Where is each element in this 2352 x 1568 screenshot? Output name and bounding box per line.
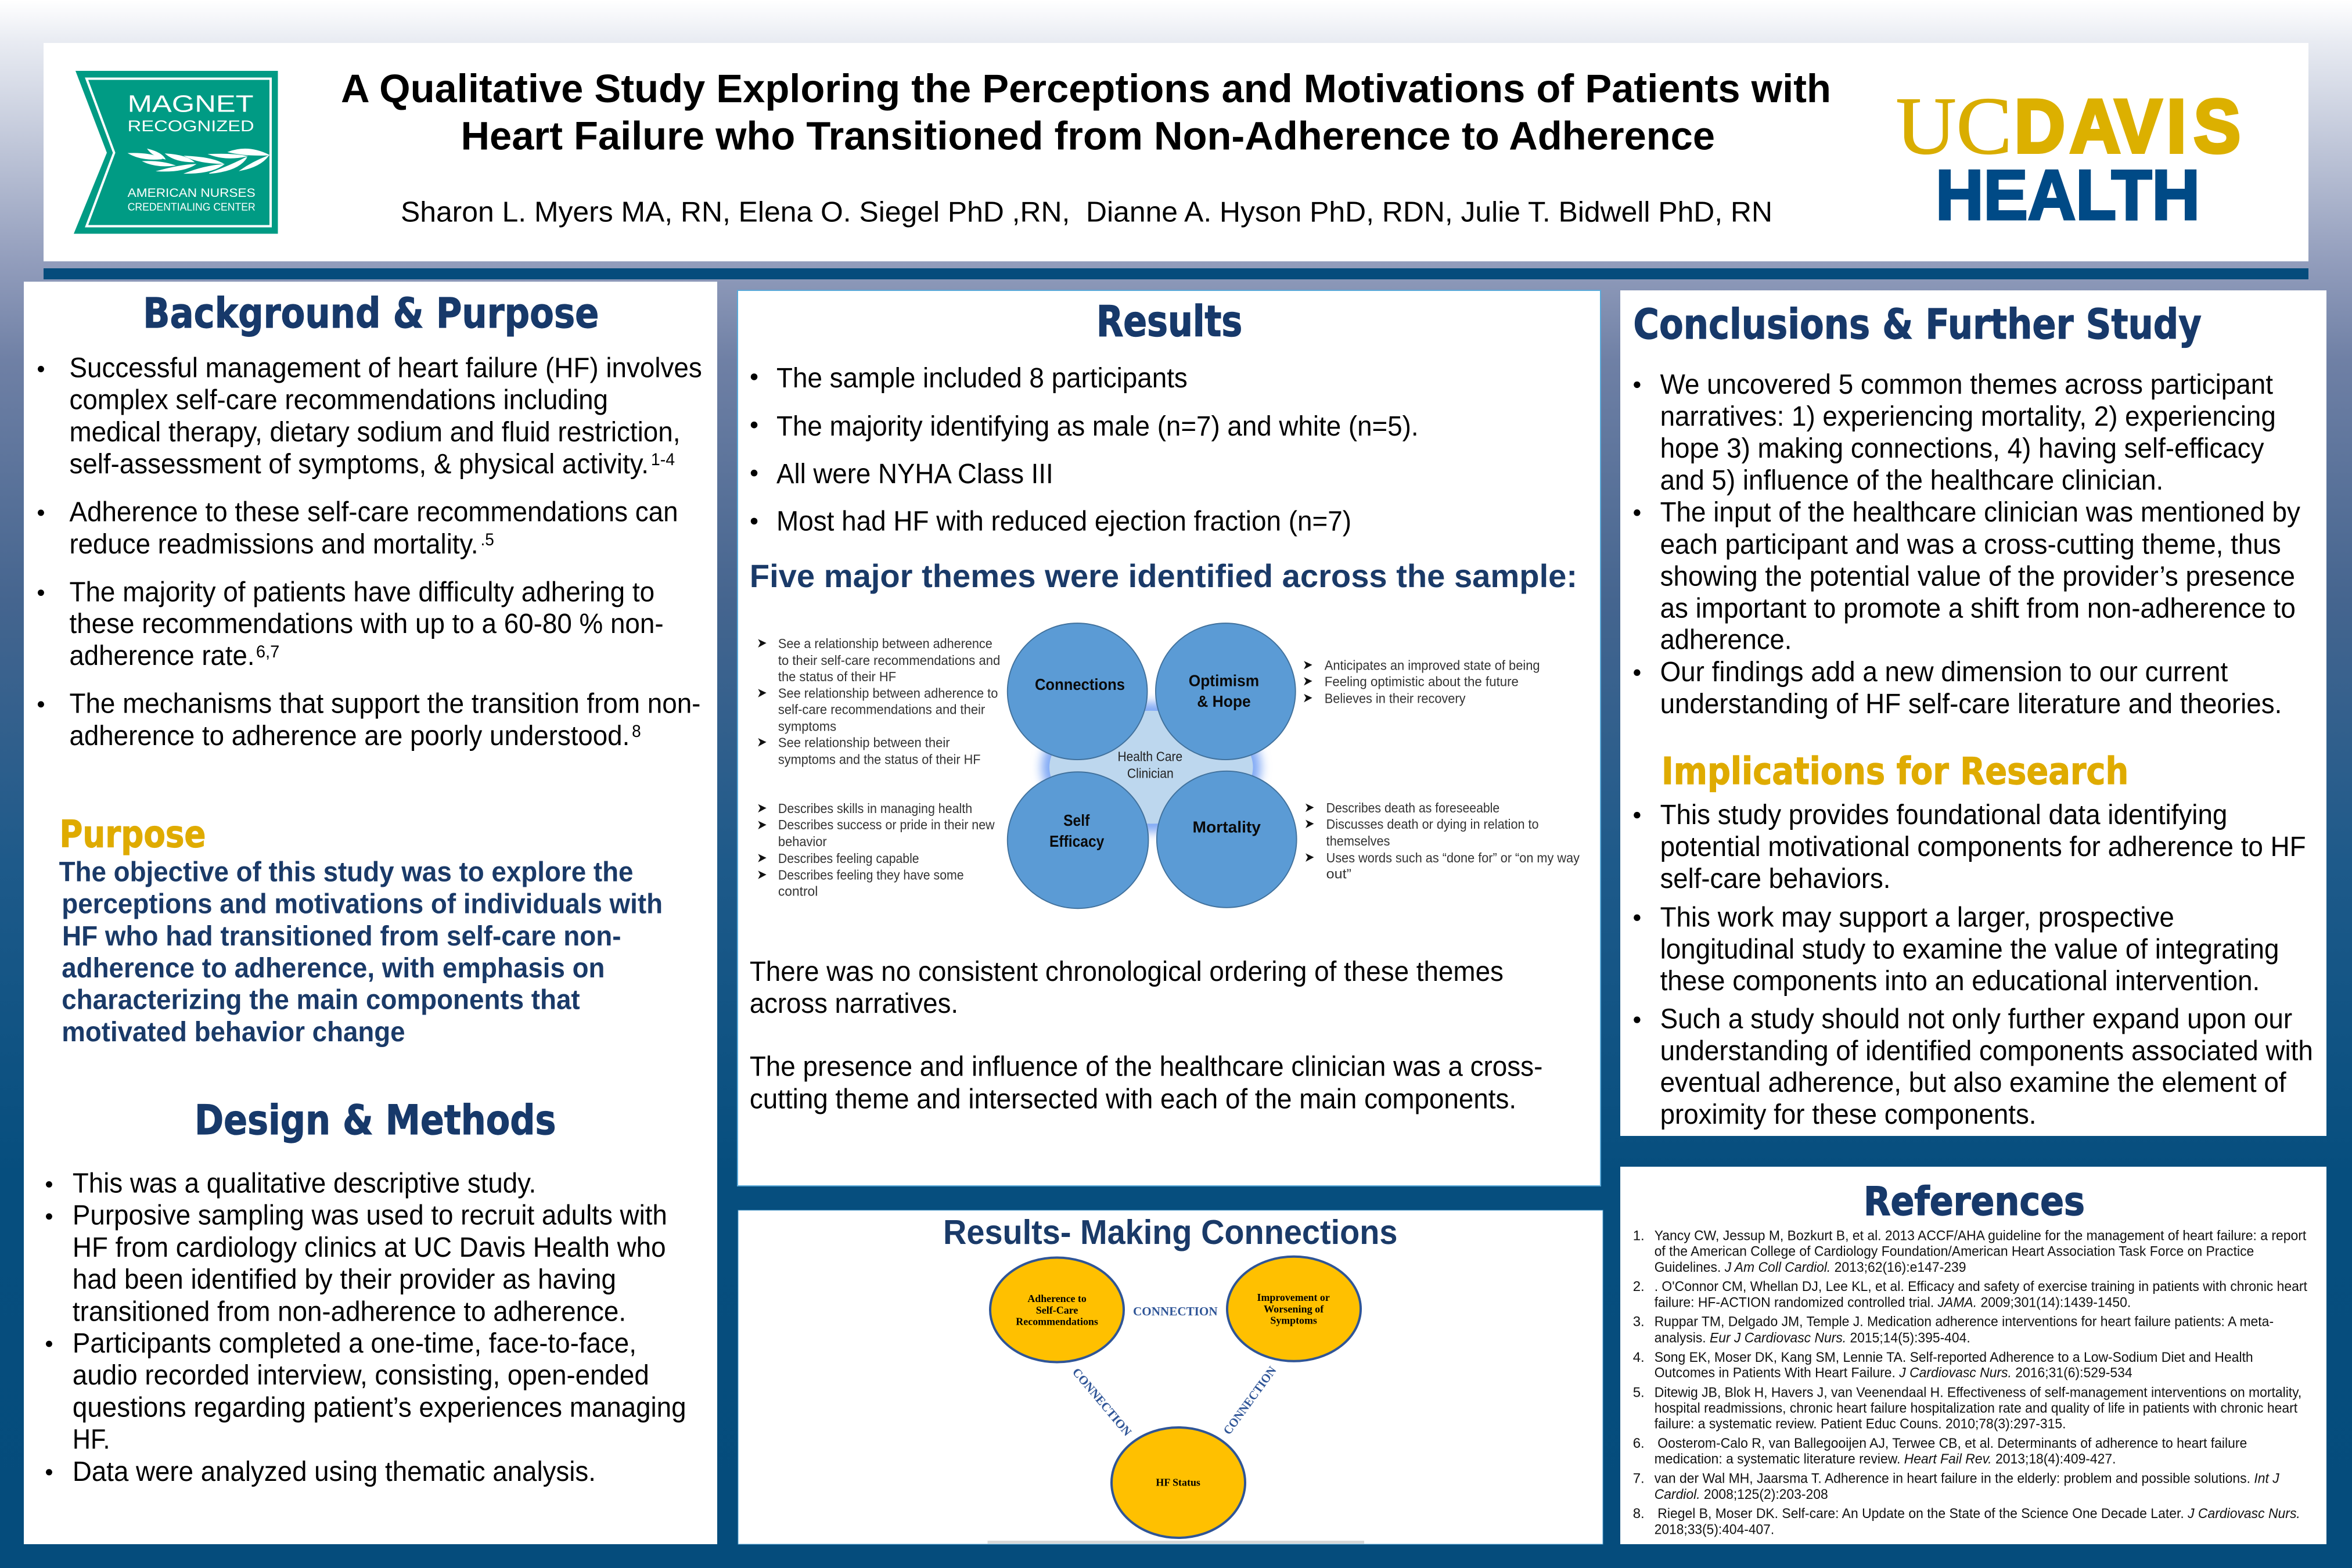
heading: Results: Results xyxy=(1096,297,1242,347)
title xyxy=(341,66,1831,158)
authors: Sharon L. Myers MA, RN, Elena O. Siegel PhD ,RN, Dianne A. Hyson PhD, RDN, Julie T. Bidwell PhD, RN xyxy=(401,197,1772,228)
circle: symptoms: Worsening of xyxy=(1264,1303,1324,1315)
panel: background, purpose, design and methods xyxy=(24,282,717,1544)
purpose statement: perceptions and motivations of individuals with xyxy=(62,889,663,920)
purpose statement: The objective of this study was to explore the xyxy=(59,857,633,887)
logo: Magnet Recognized: CREDENTIALING CENTER xyxy=(128,202,256,213)
logo: UC Davis Health: HEALTH xyxy=(1936,156,2200,235)
heading: Implications for Research: Implications for Research xyxy=(1661,750,2128,793)
purpose statement: characterizing the main components that xyxy=(62,985,580,1016)
circle: self efficacy: Self xyxy=(1063,811,1090,829)
reference list: 2. xyxy=(1633,1279,1645,1294)
bullet: further study xyxy=(1634,1004,2313,1130)
list: self efficacy descriptors: Describes feeling they have some xyxy=(778,868,964,883)
reference list: 1. xyxy=(1633,1228,1645,1243)
bullet: further study: proximity for these components. xyxy=(1660,1099,2037,1130)
list: self efficacy descriptors: Describes feeling capable xyxy=(778,851,919,866)
bullet list: methods: Data were analyzed using thematic analysis. xyxy=(73,1456,596,1487)
reference list: 2018;33(5):404-407. xyxy=(1655,1522,1774,1538)
reference list: Ditewig JB, Blok H, Havers J, van Veenendaal H. Effectiveness of self-management interventions on mortality, xyxy=(1655,1385,2301,1401)
bullet list: conclusions: understanding of HF self-care literature and theories. xyxy=(1660,689,2282,720)
list: self efficacy descriptors: Describes skills in managing health xyxy=(778,801,972,816)
reference list xyxy=(1633,1228,2307,1538)
list: mortality descriptors: Uses words such as “done for” or “on my way xyxy=(1326,850,1580,865)
bullet list: conclusions: showing the potential value of the provider’s presence xyxy=(1660,561,2295,592)
list: connections descriptors: self-care recommendations and their xyxy=(778,702,986,717)
header banner xyxy=(44,43,2308,261)
bullet list: conclusions xyxy=(1634,369,2300,720)
bullet list: background: self-assessment of symptoms, & physical activity. xyxy=(69,449,649,480)
reference list: Yancy CW, Jessup M, Bozkurt B, et al. 2013 ACCF/AHA guideline for the management of heart failure: a report xyxy=(1655,1228,2307,1243)
circle: self efficacy: Efficacy xyxy=(1049,832,1105,850)
bullet list: background: Successful management of heart failure (HF) involves xyxy=(69,353,702,384)
bullet list: background: .5 xyxy=(481,530,494,549)
reference list: failure: HF-ACTION randomized controlled trial. JAMA. 2009;301(14):1439-1450. xyxy=(1655,1295,2131,1311)
circle: self efficacy xyxy=(1008,772,1148,908)
center: health care clinician: Health Care xyxy=(1117,749,1182,764)
circle: adherence xyxy=(990,1258,1124,1362)
diagram: five themes xyxy=(758,623,1580,908)
heading: Design & Methods: Design & Methods xyxy=(195,1096,556,1144)
circle: optimism and hope: & Hope xyxy=(1197,692,1251,710)
reference list: van der Wal MH, Jaarsma T. Adherence in heart failure in the elderly: problem and possible solutions. Int J xyxy=(1655,1470,2280,1487)
bullet list: methods: had been identified by their provider as having xyxy=(73,1264,616,1295)
list: mortality descriptors: themselves xyxy=(1326,833,1390,848)
list: mortality descriptors: out” xyxy=(1326,866,1351,882)
reference list: failure: a systematic review. Patient Educ Couns. 2010;78(3):297-315. xyxy=(1655,1416,2066,1432)
circle: adherence: Self-Care xyxy=(1036,1304,1078,1316)
circle: connections xyxy=(1008,623,1148,760)
bullet list: implications: self-care behaviors. xyxy=(1660,864,1890,894)
heading: Background & Purpose: Background & Purpose xyxy=(143,289,599,337)
bullet list: conclusions: hope 3) making connections, 4) having self-efficacy xyxy=(1660,433,2264,464)
list: optimism descriptors: Feeling optimistic about the future xyxy=(1325,674,1519,689)
bullet list: sample: Most had HF with reduced ejection fraction (n=7) xyxy=(776,506,1351,537)
bullet list: implications: This work may support a larger, prospective xyxy=(1660,902,2174,933)
list: connections descriptors xyxy=(758,636,1000,767)
purpose statement: adherence to adherence, with emphasis on xyxy=(62,953,605,984)
list: optimism descriptors xyxy=(1304,658,1540,706)
bullet list: background: The mechanisms that support the transition from non- xyxy=(69,689,700,720)
bullet list: background: 8 xyxy=(632,722,641,741)
logo: UC Davis Health: UC xyxy=(1896,81,2012,171)
list: connections descriptors: See relationship between adherence to xyxy=(778,686,998,701)
list: connections descriptors: See a relationship between adherence xyxy=(778,636,992,651)
circle: adherence: Adherence to xyxy=(1027,1293,1087,1304)
bullet list: background: The majority of patients have difficulty adhering to xyxy=(69,577,654,607)
bullet list: conclusions: narratives: 1) experiencing mortality, 2) experiencing xyxy=(1660,401,2276,432)
list: connections descriptors: the status of their HF xyxy=(778,669,896,684)
text block: chronological ordering and clinician: cutting theme and intersected with each of the main components. xyxy=(750,1084,1516,1115)
logo: Magnet Recognized: MAGNET xyxy=(128,91,254,117)
reference list: 7. xyxy=(1633,1470,1645,1487)
panel: results xyxy=(738,290,1601,1186)
circle: HF status: HF Status xyxy=(1156,1476,1200,1488)
bullet list: conclusions: The input of the healthcare clinician was mentioned by xyxy=(1660,497,2300,528)
bullet list: conclusions: Our findings add a new dimension to our current xyxy=(1660,657,2228,688)
reference list: 5. xyxy=(1633,1385,1645,1401)
title: Heart Failure who Transitioned from Non-Adherence to Adherence xyxy=(461,113,1715,158)
reference list: 3. xyxy=(1633,1314,1645,1330)
bullet list: methods: HF from cardiology clinics at UC Davis Health who xyxy=(73,1232,666,1263)
bullet: further study: understanding of identified components associated with xyxy=(1660,1036,2313,1067)
circle: adherence: Recommendations xyxy=(1016,1316,1098,1328)
bullet list: conclusions: We uncovered 5 common themes across participant xyxy=(1660,369,2273,400)
list: connections descriptors: See relationship between their xyxy=(778,735,950,750)
diagram: connection triangle xyxy=(990,1257,1361,1538)
bullet list: background: adherence rate. xyxy=(69,641,254,671)
bullet list: implications: This study provides foundational data identifying xyxy=(1660,800,2227,830)
bullet list: methods: questions regarding patient’s experiences managing xyxy=(73,1392,686,1423)
list: connections descriptors: symptoms xyxy=(778,718,836,733)
bullet list: background: adherence to adherence are poorly understood. xyxy=(69,721,630,751)
panel: references xyxy=(1620,1167,2326,1544)
label: connection right: CONNECTION xyxy=(1220,1364,1279,1437)
purpose statement xyxy=(59,857,663,1048)
bullet list: background: reduce readmissions and mortality. xyxy=(69,529,479,560)
list: self efficacy descriptors xyxy=(758,801,995,899)
center: health care clinician: Clinician xyxy=(1127,765,1174,781)
bullet list: background: medical therapy, dietary sodium and fluid restriction, xyxy=(69,417,680,448)
bullet list: methods: This was a qualitative descriptive study. xyxy=(73,1168,536,1199)
reference list: 4. xyxy=(1633,1350,1645,1365)
bullet list: implications: potential motivational components for adherence to HF xyxy=(1660,832,2306,862)
logo: UC Davis Health xyxy=(1896,81,2240,235)
purpose statement: HF who had transitioned from self-care non- xyxy=(62,921,621,952)
list: optimism descriptors: Anticipates an improved state of being xyxy=(1325,658,1540,673)
bullet list: methods: audio recorded interview, consisting, open-ended xyxy=(73,1360,649,1391)
bullet list: background: 1-4 xyxy=(651,450,675,469)
reference list: Cardiol. 2008;125(2):203-208 xyxy=(1655,1487,1828,1502)
bullet: further study: Such a study should not only further expand upon our xyxy=(1660,1004,2292,1035)
text block: chronological ordering and clinician xyxy=(750,956,1542,1115)
bullet list: methods xyxy=(46,1168,686,1487)
bullet list: background: these recommendations with up to a 60-80 % non- xyxy=(69,609,664,639)
list: mortality descriptors xyxy=(1306,800,1580,882)
text block: chronological ordering and clinician: across narratives. xyxy=(750,988,958,1019)
bullet list: methods: Participants completed a one-time, face-to-face, xyxy=(73,1328,636,1359)
logo: Magnet Recognized: AMERICAN NURSES xyxy=(128,186,256,200)
bullet list: conclusions: adherence. xyxy=(1660,625,1792,656)
label: connection top: CONNECTION xyxy=(1133,1304,1218,1318)
heading: Purpose: Purpose xyxy=(59,814,206,857)
list: optimism descriptors: Believes in their recovery xyxy=(1325,691,1466,706)
text block: chronological ordering and clinician: There was no consistent chronological ordering of these themes xyxy=(750,956,1504,987)
bullet list: sample xyxy=(751,363,1419,537)
logo: Magnet Recognized: RECOGNIZED xyxy=(128,117,254,135)
list: connections descriptors: symptoms and the status of their HF xyxy=(778,751,981,767)
list: mortality descriptors: Describes death as foreseeable xyxy=(1326,800,1499,815)
reference list: of the American College of Cardiology Foundation/American Heart Association Task Force on Practice xyxy=(1655,1244,2254,1260)
title: A Qualitative Study Exploring the Perceptions and Motivations of Patients with xyxy=(341,66,1831,111)
logo: Magnet Recognized xyxy=(74,71,278,233)
list: self efficacy descriptors: behavior xyxy=(778,834,827,849)
circle: mortality: Mortality xyxy=(1193,818,1261,836)
bullet list: methods: HF. xyxy=(73,1425,110,1455)
bullet list: implications: longitudinal study to examine the value of integrating xyxy=(1660,934,2279,965)
heading: References: References xyxy=(1864,1179,2085,1225)
list: self efficacy descriptors: control xyxy=(778,884,818,899)
circle: symptoms: Symptoms xyxy=(1270,1315,1317,1326)
reference list: Riegel B, Moser DK. Self-care: An Update on the State of the Science One Decade Later. J Cardiovasc Nurs. xyxy=(1657,1506,2300,1522)
purpose statement: motivated behavior change xyxy=(62,1017,405,1048)
reference list: Oosterom-Calo R, van Ballegooijen AJ, Terwee CB, et al. Determinants of adherence to heart failure xyxy=(1657,1436,2247,1451)
bullet list: background: complex self-care recommendations including xyxy=(69,385,608,416)
bullet list: sample: All were NYHA Class III xyxy=(776,459,1053,490)
circle: HF status xyxy=(1112,1427,1245,1538)
circle: mortality xyxy=(1157,771,1297,908)
bullet list: implications xyxy=(1634,800,2306,997)
bullet list: implications: these components into an educational intervention. xyxy=(1660,966,2260,997)
bullet list: background: 6,7 xyxy=(256,642,279,661)
reference list: analysis. Eur J Cardiovasc Nurs. 2015;14(5):395-404. xyxy=(1655,1330,1970,1346)
heading: Results- Making Connections: Results- Making Connections xyxy=(943,1213,1397,1251)
list: mortality descriptors: Discusses death or dying in relation to xyxy=(1326,817,1539,832)
reference list: Guidelines. J Am Coll Cardiol. 2013;62(16):e147-239 xyxy=(1655,1260,1966,1275)
bullet list: sample: The majority identifying as male (n=7) and white (n=5). xyxy=(776,411,1419,442)
reference list: Ruppar TM, Delgado JM, Temple J. Medication adherence interventions for heart failure patients: A meta- xyxy=(1655,1314,2274,1330)
list: self efficacy descriptors: Describes success or pride in their new xyxy=(778,817,995,832)
bullet list: methods: transitioned from non-adherence to adherence. xyxy=(73,1296,626,1327)
reference list: hospital readmissions, chronic heart failure hospitalization rate and quality of life in patients with chronic heart xyxy=(1655,1400,2297,1416)
reference list: . O'Connor CM, Whellan DJ, Lee KL, et al. Efficacy and safety of exercise training in patients with chronic heart xyxy=(1655,1279,2307,1294)
list: connections descriptors: to their self-care recommendations and xyxy=(778,653,1000,668)
bullet list: sample: The sample included 8 participants xyxy=(776,363,1188,394)
reference list: Outcomes in Patients With Heart Failure. J Cardiovasc Nurs. 2016;31(6):529-534 xyxy=(1655,1365,2132,1381)
circle: optimism and hope: Optimism xyxy=(1189,671,1259,689)
panel: results making connections xyxy=(738,1210,1603,1544)
logo: UC Davis Health: DAVIS xyxy=(2015,84,2240,168)
bullet list: conclusions: each participant and was a cross-cutting theme, thus xyxy=(1660,529,2281,560)
panel: conclusions and implications xyxy=(1620,290,2326,1136)
bullet list: conclusions: and 5) influence of the healthcare clinician. xyxy=(1660,465,2163,496)
bullet list: methods: Purposive sampling was used to recruit adults with xyxy=(73,1200,667,1231)
reference list: medication: a systematic literature review. Heart Fail Rev. 2013;18(4):409-427. xyxy=(1655,1451,2116,1467)
circle: optimism and hope xyxy=(1156,623,1296,760)
reference list: 6. xyxy=(1633,1436,1645,1451)
heading: Conclusions & Further Study: Conclusions & Further Study xyxy=(1633,300,2202,348)
reference list: 8. xyxy=(1633,1506,1645,1522)
text block: chronological ordering and clinician: The presence and influence of the healthcare clinician was a cross- xyxy=(750,1052,1542,1083)
bullet list: background: Adherence to these self-care recommendations can xyxy=(69,497,678,528)
center: health care clinician xyxy=(1042,702,1261,832)
circle: connections: Connections xyxy=(1035,675,1125,693)
reference list: Song EK, Moser DK, Kang SM, Lennie TA. Self-reported Adherence to a Low-Sodium Diet and Health xyxy=(1655,1350,2253,1365)
bullet: further study: eventual adherence, but also examine the element of xyxy=(1660,1067,2286,1098)
circle: symptoms xyxy=(1227,1257,1361,1361)
bullet list: background xyxy=(38,353,702,751)
circle: symptoms: Improvement or xyxy=(1257,1292,1330,1303)
bullet list: conclusions: as important to promote a shift from non-adherence to xyxy=(1660,593,2296,624)
subheading: five major themes: Five major themes were identified across the sample: xyxy=(750,558,1577,594)
label: connection left: CONNECTION xyxy=(1070,1365,1134,1438)
